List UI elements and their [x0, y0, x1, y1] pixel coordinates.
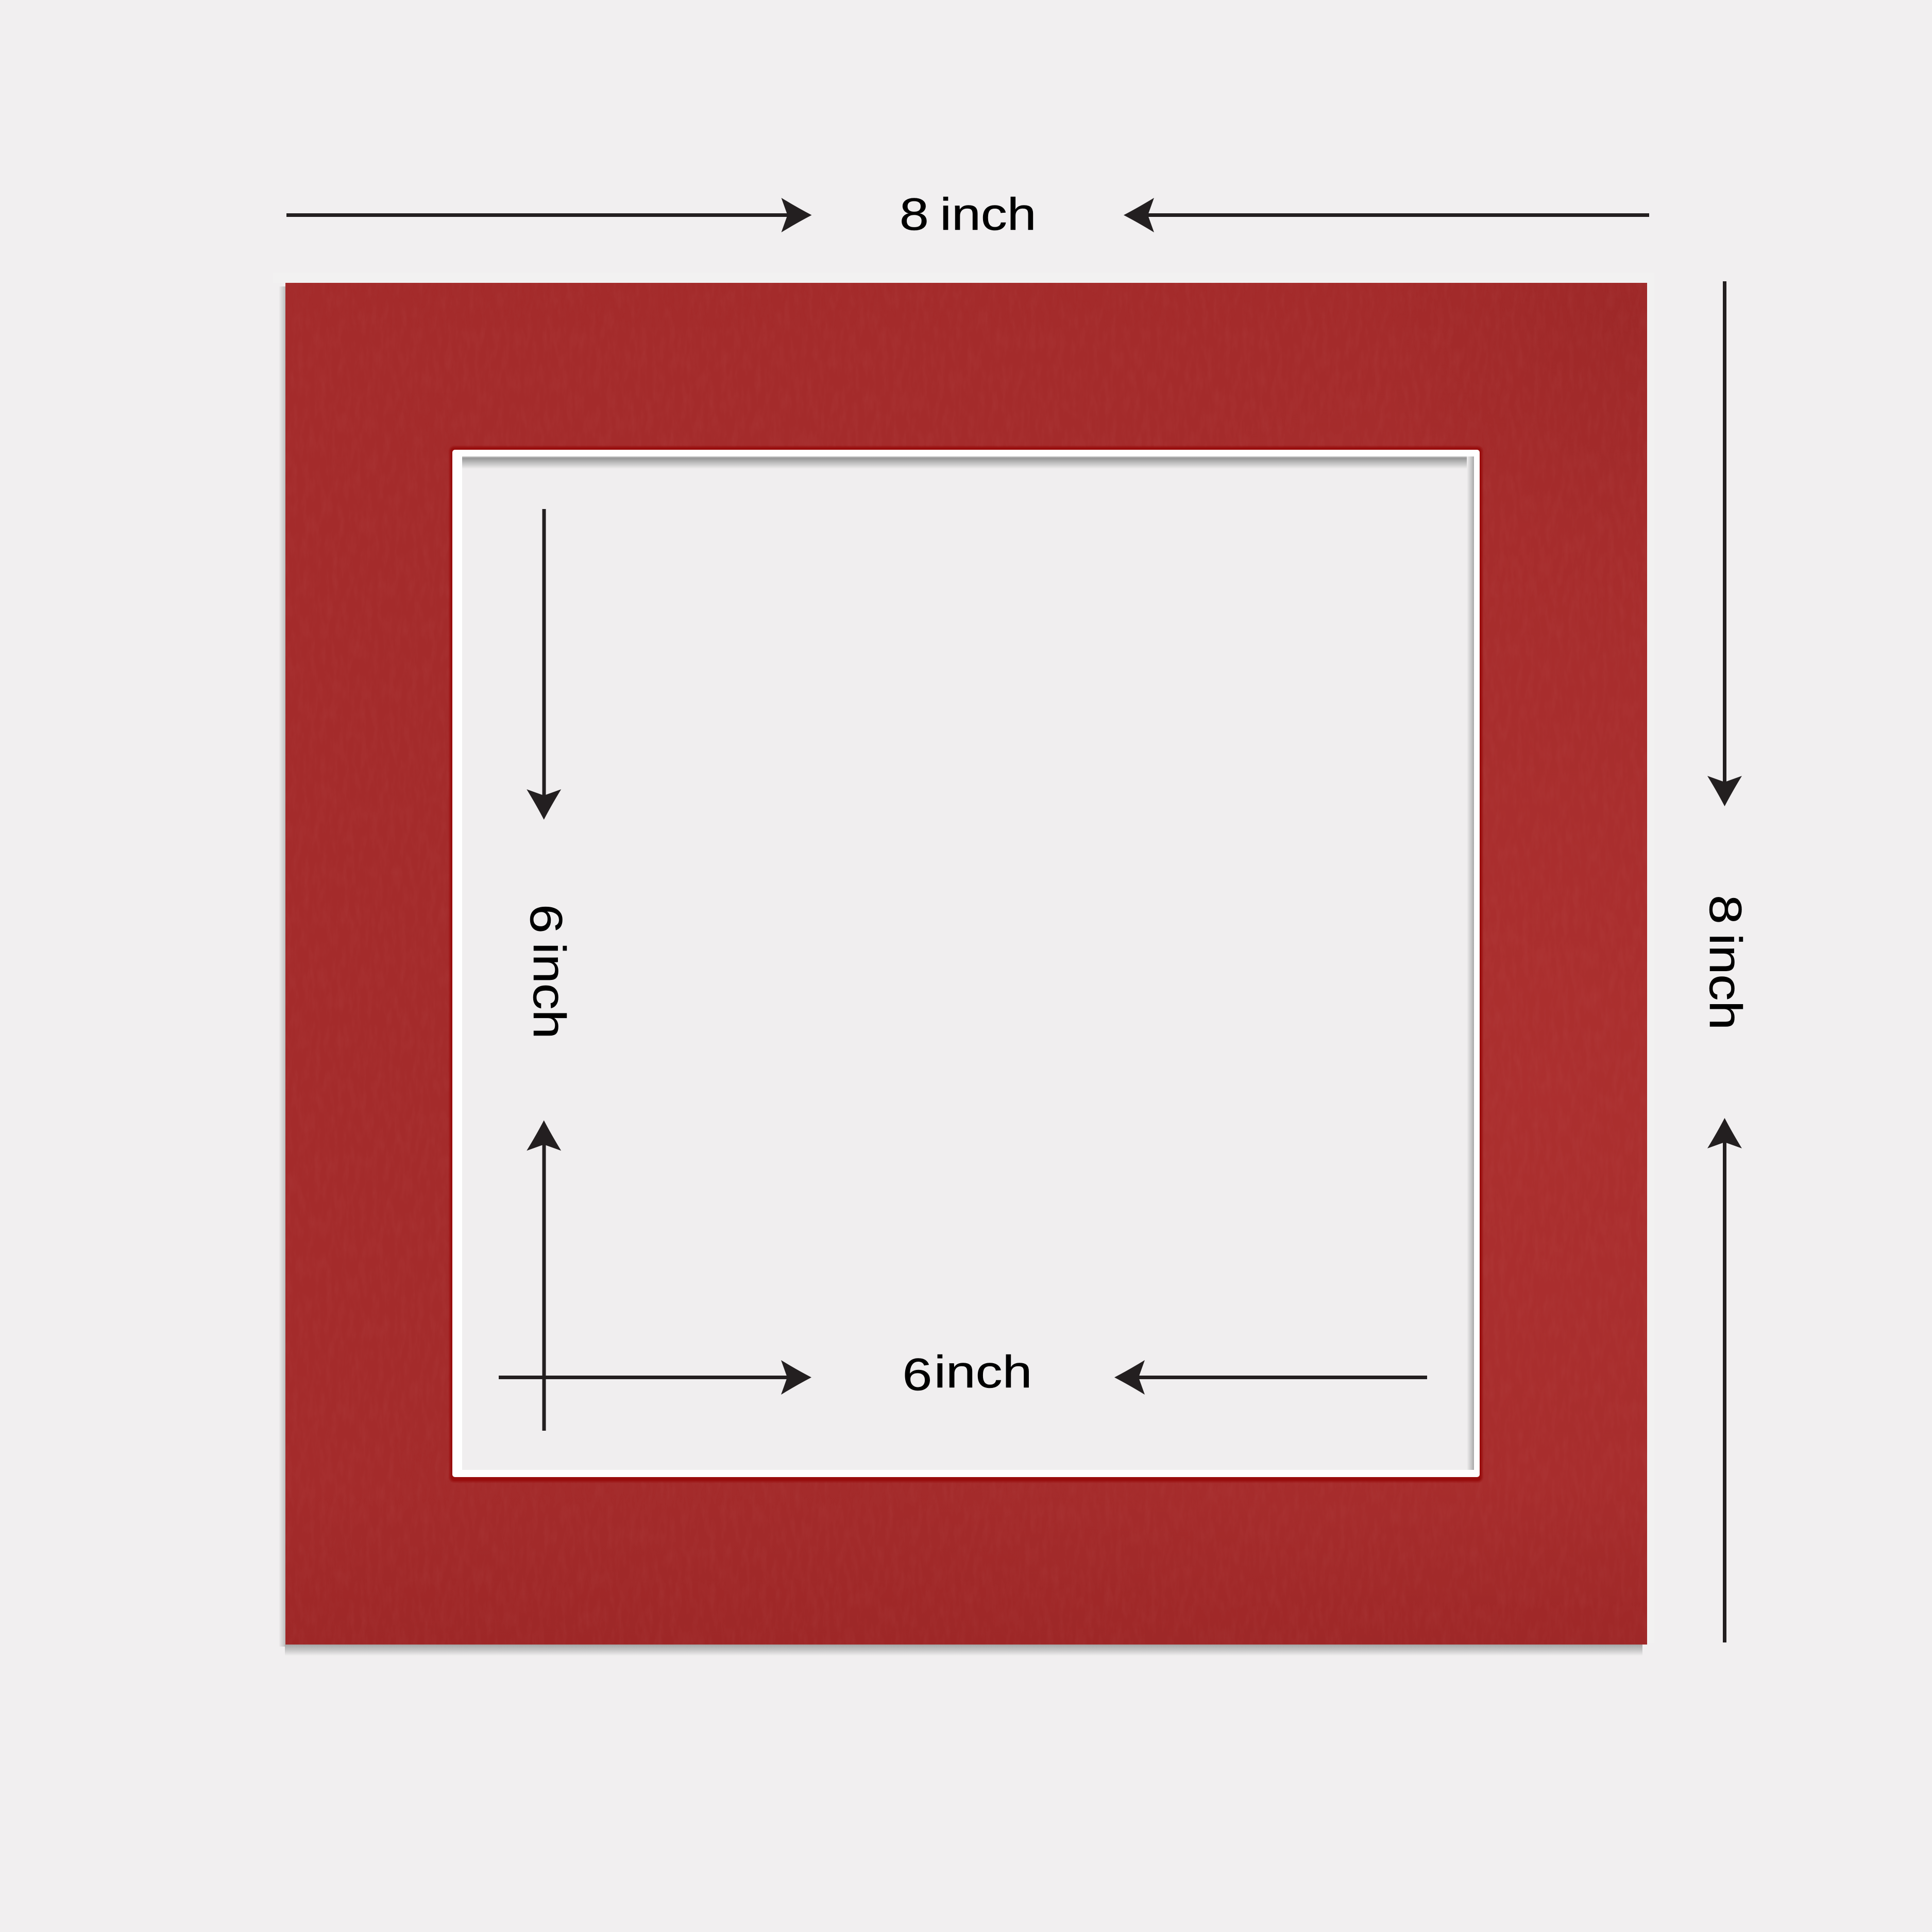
panel: red photo mat: [273, 273, 1654, 1656]
label: 6 inch inner left: inch: [524, 942, 574, 1039]
arrow: top left pointing right: [286, 198, 812, 232]
label: 6 inch inner bottom: inch: [934, 1347, 1032, 1397]
label: 6 inch inner left: 6: [521, 904, 571, 948]
arrow: right side pointing up: [1707, 1118, 1742, 1642]
diagram canvas: [280, 197, 1743, 1655]
mat board: [285, 283, 1647, 1645]
arrow: top right pointing left: [1124, 198, 1649, 232]
dimension: inner height 6 inch: [521, 509, 574, 1431]
arrow: inner bottom pointing left: [1114, 1360, 1427, 1395]
label: 6 inch inner bottom: 6: [903, 1349, 947, 1400]
label: 8 inch top: 8: [900, 190, 943, 240]
arrow: inner bottom pointing right: [499, 1360, 811, 1395]
opening: bevel edge and inner window: [450, 447, 1482, 1482]
arrow: inner left pointing down: [527, 509, 561, 820]
label: 8 inch top: inch: [940, 190, 1037, 240]
label: 8 inch right: inch: [1700, 934, 1750, 1030]
label: 8 inch right: 8: [1700, 895, 1750, 939]
dimension: top width 8 inch: [286, 190, 1649, 240]
arrow: inner left pointing up: [527, 1120, 561, 1431]
dimension: inner width 6 inch: [499, 1347, 1427, 1400]
dimension: right height 8 inch: [1700, 281, 1750, 1642]
arrow: right side pointing down: [1707, 281, 1742, 806]
mat drop shadow: [273, 273, 1654, 1656]
